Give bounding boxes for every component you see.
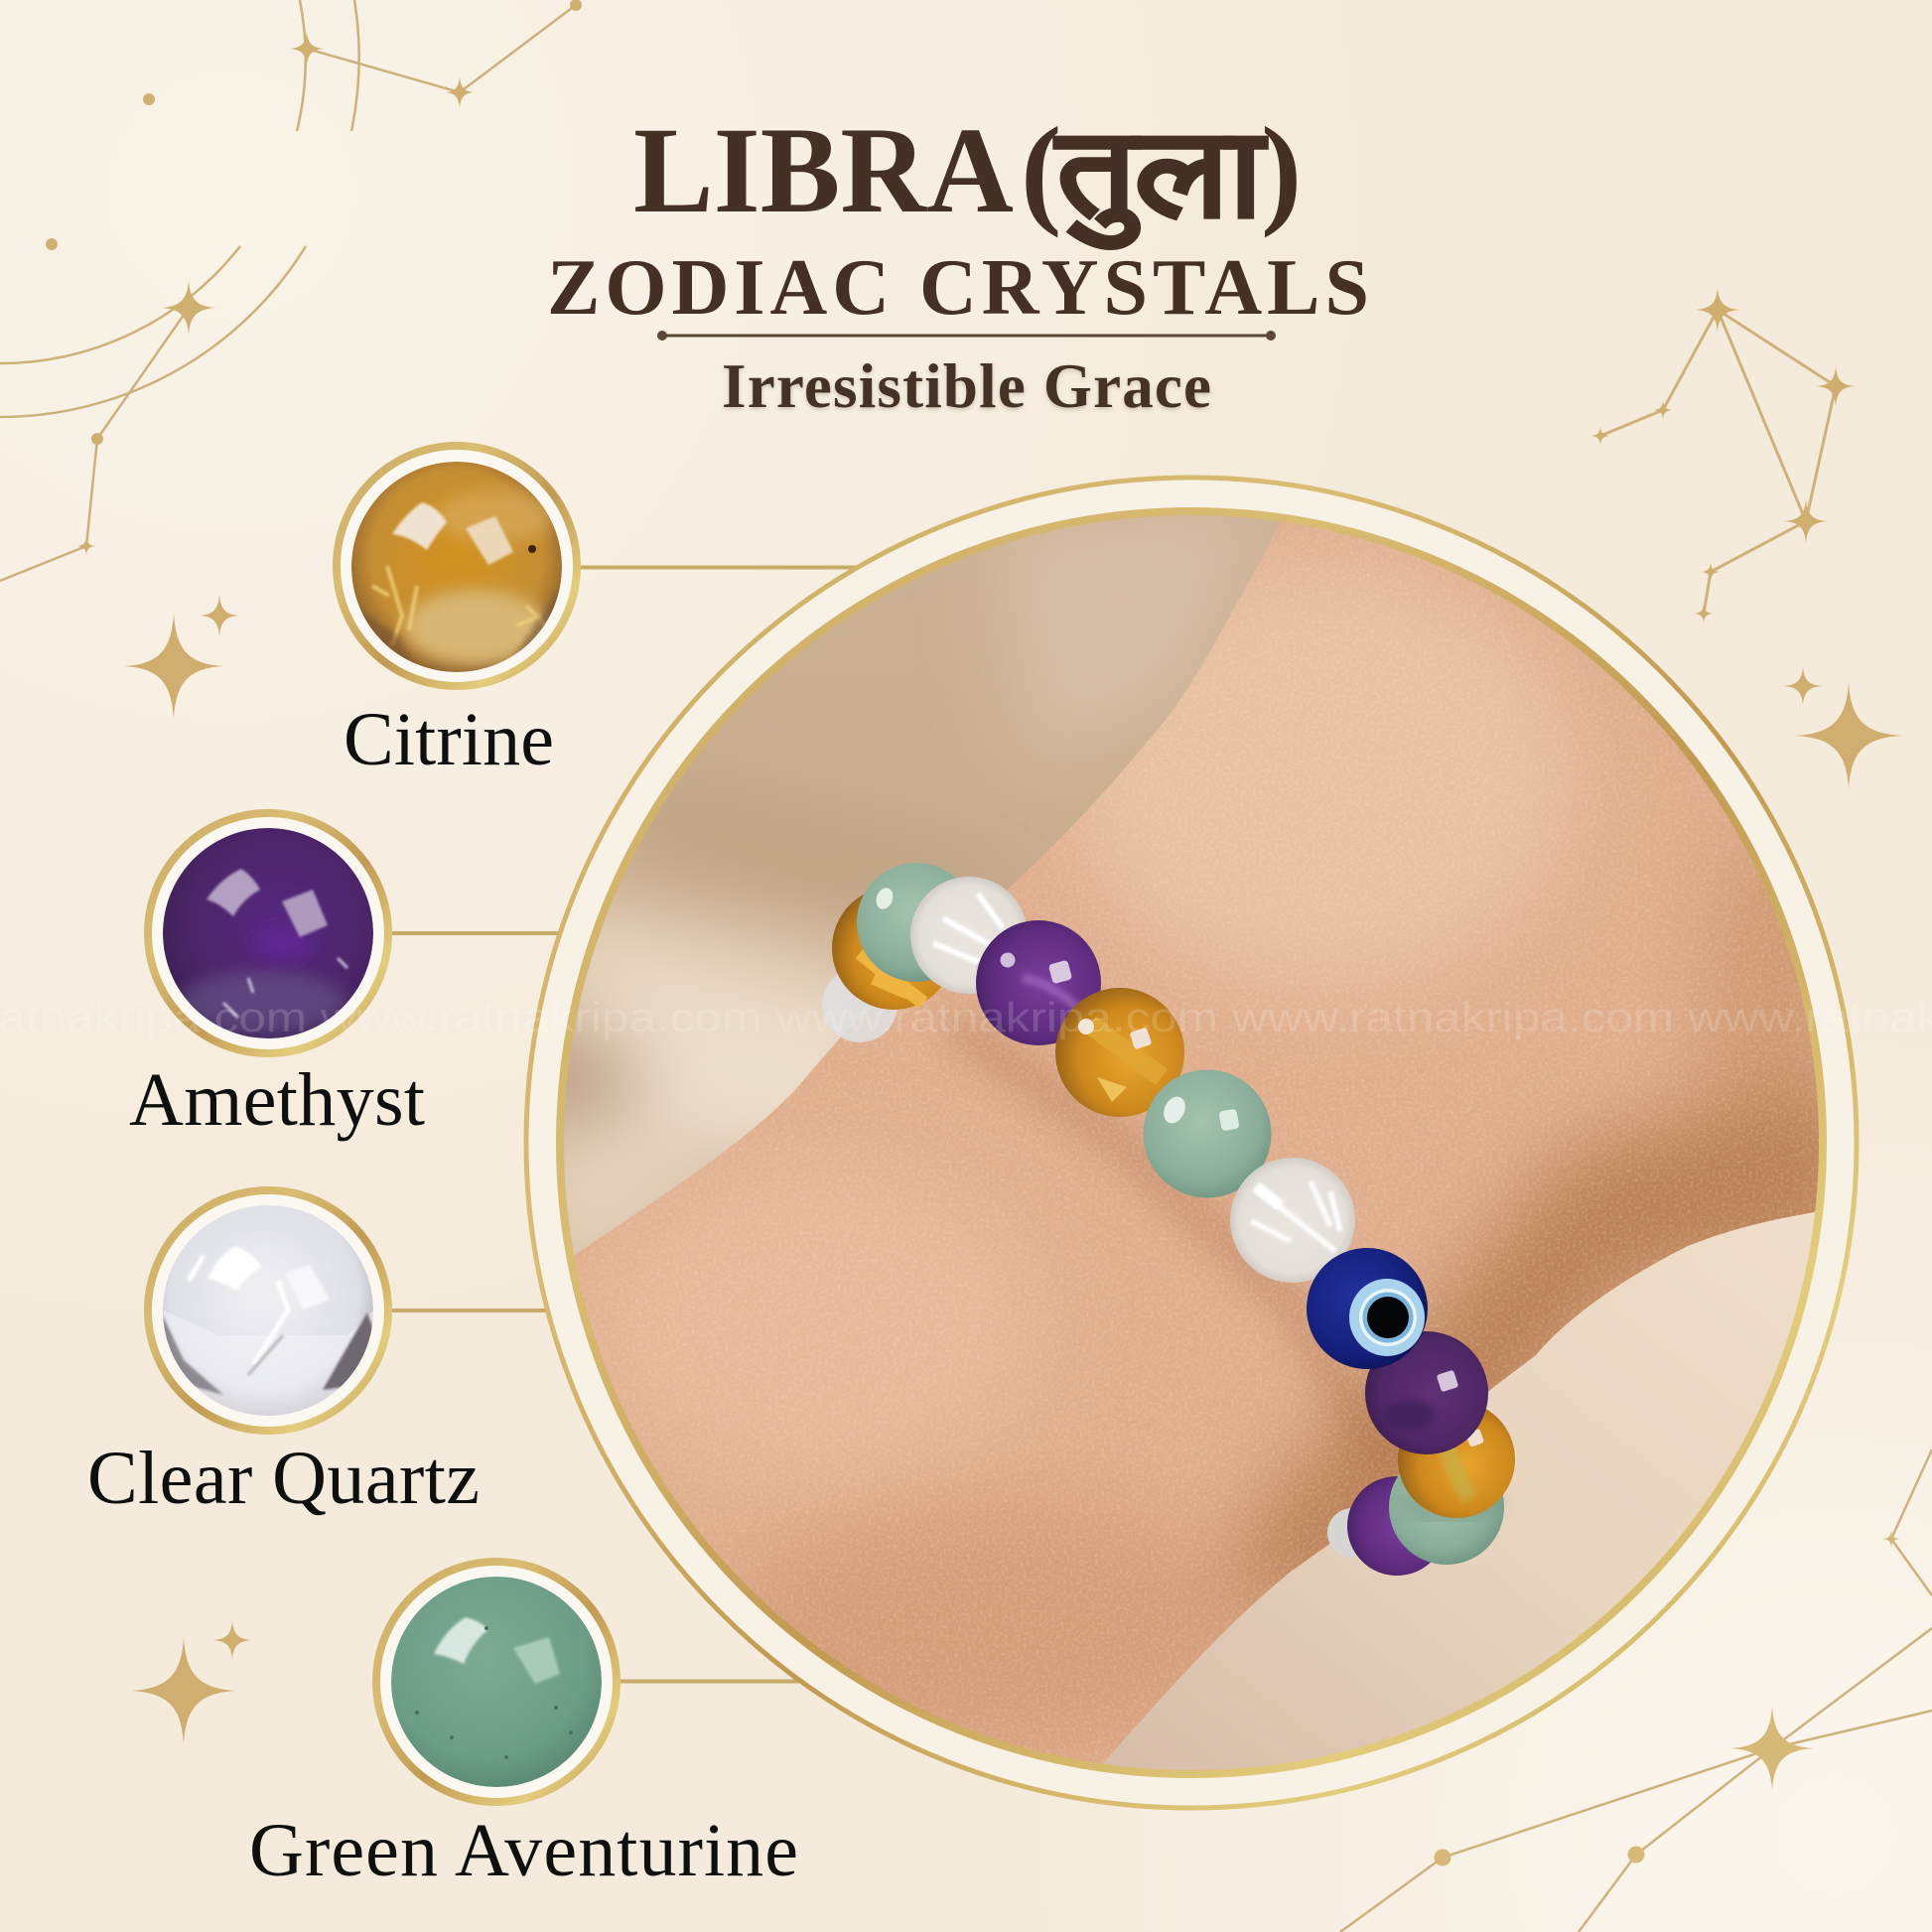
title: Libra: तुला [1054,88,1268,275]
label: amethyst: Amethyst [129,1058,425,1142]
sparkles: left lower [131,1620,252,1744]
watermark: www.ratnakripa.com [320,994,762,1040]
photo backdrop [564,515,1815,1770]
far side beads [1327,1473,1507,1576]
watermark: www.ratnakripa.com [775,994,1218,1040]
constellation: bottom right [1340,1449,1932,1932]
gem: citrine [337,446,577,686]
divider [657,331,1276,341]
gem: clear quartz [148,1190,388,1440]
arm [574,522,1819,1763]
sparkles: left upper [124,594,239,720]
constellation: Libra top right [1590,287,1856,623]
connector lines [392,568,858,1682]
title: Libra: ) [1261,102,1302,238]
watermark [0,994,1932,1040]
bead: green middle [1144,1070,1271,1197]
watermark: www.ratnakripa.com [1231,994,1674,1040]
back quartz and citrine [822,894,941,1042]
bracelet [822,863,1515,1576]
bead: amethyst upper [976,920,1101,1045]
constellation: top left [0,0,582,581]
tagline: Irresistible Grace [722,351,1211,421]
label: green aventurine: Green Aventurine [249,1809,798,1892]
bead: citrine lower [1398,1401,1515,1518]
bead: amethyst lower [1365,1331,1488,1454]
bead: quartz middle [1230,1158,1355,1283]
gem: green aventurine [376,1562,617,1802]
bead: green upper [857,863,956,982]
bead: quartz upper [910,877,1028,994]
bead: citrine middle [1055,988,1184,1117]
title: Libra: ( [1021,102,1061,238]
main photo medallion [496,467,1906,1857]
label: clear quartz: Clear Quartz [87,1437,480,1520]
subtitle: zodiac crystals: ZODIAC CRYSTALS [547,244,1369,332]
label: citrine: Citrine [344,698,554,781]
gem: amethyst [148,813,388,1053]
bead: evil eye [1307,1248,1428,1369]
sparkles: right [1783,666,1902,789]
photo: wrist with bracelet [564,515,1819,1770]
title: Libra [633,88,1302,275]
title: Libra: LIBRA [633,102,1014,238]
outer ring [526,478,1857,1808]
title block [547,88,1369,421]
inner ring [560,511,1823,1774]
